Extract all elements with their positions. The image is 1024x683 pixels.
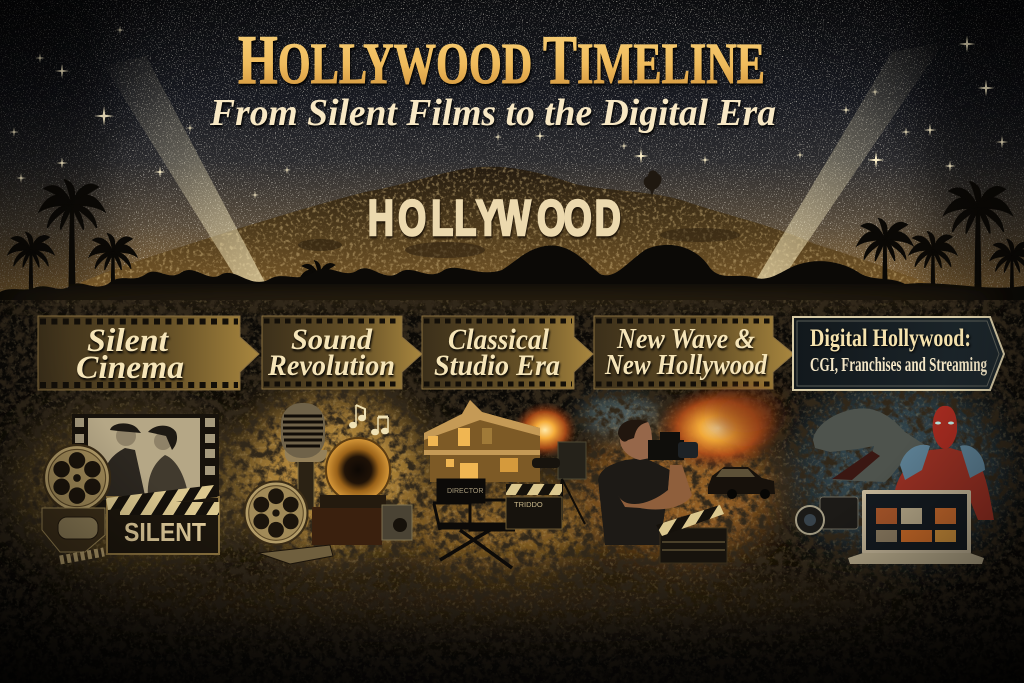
explosion glow: [513, 402, 577, 458]
figure: cameraman: [598, 420, 692, 545]
film strip: [60, 552, 104, 560]
icon: projector: [42, 508, 105, 552]
banner title: Revolution: [267, 349, 395, 382]
title: HOLLYWOOD TIMELINE: [238, 22, 765, 99]
banner title: Studio Era: [434, 349, 560, 382]
banner title: New Hollywood: [604, 350, 768, 381]
streaming thumbnails: [876, 508, 956, 542]
banner: Sound Revolution: [262, 316, 422, 389]
banner title: Silent: [87, 323, 169, 359]
explosion: [656, 386, 780, 470]
icon: vintage microphone: [281, 403, 327, 510]
panel: Digital Hollywood: [793, 317, 1004, 564]
star sparkles: [9, 26, 1008, 199]
panel: New Wave and New Hollywood: [594, 316, 794, 563]
banner: Digital Hollywood: [793, 317, 1004, 390]
banner: Silent Cinema: [38, 316, 259, 390]
banner title: Digital Hollywood:: [810, 325, 971, 352]
icon: clapperboard: [106, 485, 219, 554]
icon: film reel: [44, 445, 110, 511]
icon: digital camera: [796, 497, 858, 534]
banner: New Wave & New Hollywood: [594, 316, 794, 389]
palm trees right: [857, 182, 1024, 311]
panel: Silent Cinema: [38, 316, 259, 560]
subtitle: From Silent Films to the Digital Era: [209, 92, 776, 134]
film strip: [258, 545, 333, 564]
chair label: DIRECTOR: [447, 488, 483, 495]
icon: T-rex dinosaur: [813, 408, 925, 482]
spotlight beam right: [750, 42, 944, 294]
banner title: Cinema: [76, 350, 184, 386]
icon: music notes: [350, 405, 388, 435]
icon: clapperboard: [656, 505, 727, 563]
panel: Classical Studio Era: [422, 316, 593, 568]
man and woman figures: [100, 423, 188, 500]
clapper label: SILENT: [124, 517, 206, 547]
palm trees left: [8, 180, 339, 326]
banner: Classical Studio Era: [422, 316, 593, 389]
spotlight beam left: [104, 56, 268, 294]
icon: clapperboard: [506, 484, 562, 529]
background: night sky: [0, 0, 1024, 320]
banner title: Classical: [448, 323, 550, 356]
icon: small camera: [382, 505, 412, 540]
icon: gramophone box: [312, 495, 386, 545]
panel: Sound Revolution: [244, 316, 422, 564]
icon: video camera: [648, 432, 698, 460]
banner title: New Wave &: [616, 324, 755, 355]
lower background glow: [0, 292, 1024, 683]
icon: gramophone horn: [326, 438, 390, 502]
icon: film reel: [244, 482, 308, 544]
hill: [79, 166, 927, 286]
figure: superhero: [895, 406, 994, 520]
banner title: Sound: [291, 323, 373, 356]
Hollywood sign: HOLLYWOOD: [368, 191, 621, 246]
icon: film camera on tripod: [532, 442, 586, 524]
icon: laptop streaming screen: [848, 490, 984, 564]
tree line: [0, 245, 1024, 683]
icon: studio building: [424, 400, 540, 482]
icon: director chair: [433, 479, 515, 568]
clapper label: TRIDDO: [514, 500, 543, 509]
icon: police car: [708, 467, 775, 499]
icon: silent film frame: [72, 414, 219, 514]
projector lens: [58, 517, 98, 539]
